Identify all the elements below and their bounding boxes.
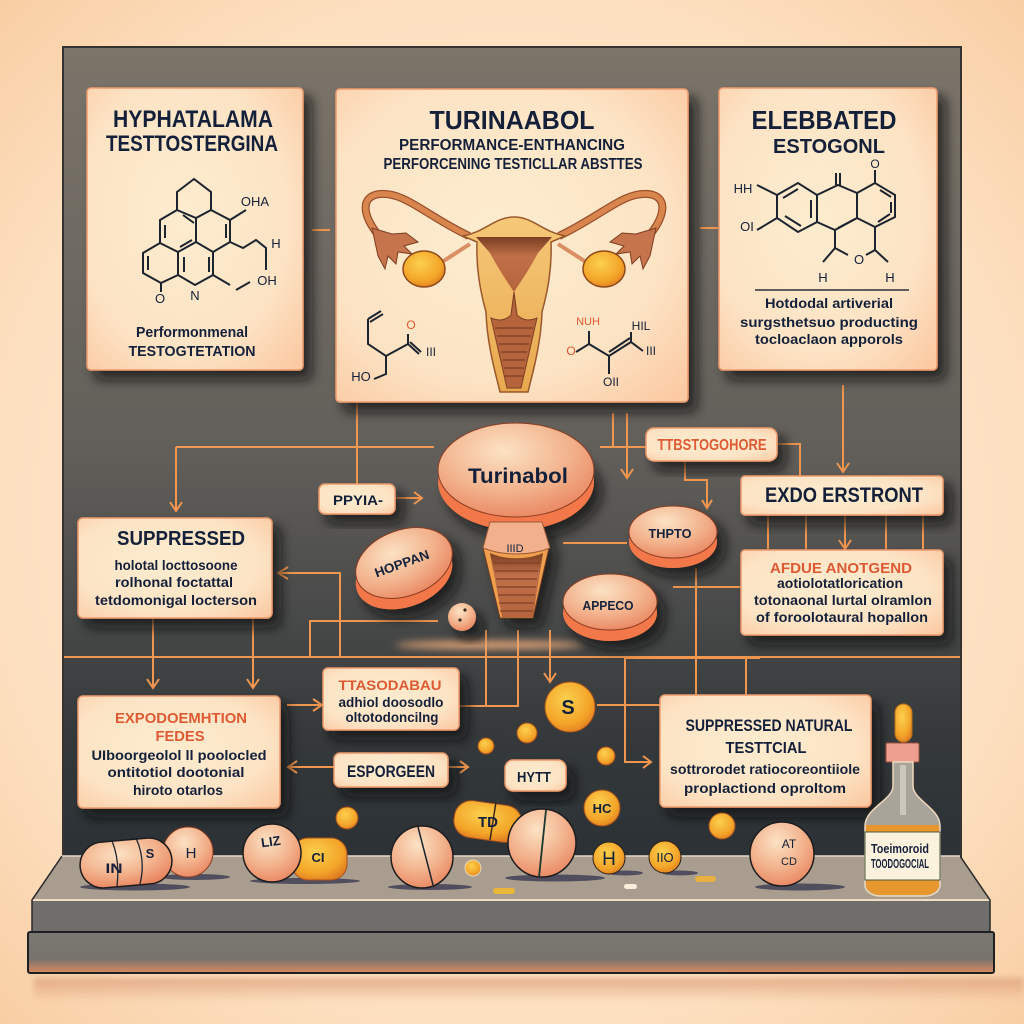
panel: turinabol anatomy: OII — [603, 375, 619, 389]
pill: turinabol with organ: Turinabol — [468, 465, 568, 488]
panel: suppressed natural testicial: SUPPRESSED NATURAL — [686, 716, 852, 735]
panel: hypothalamic testosterone: O — [155, 291, 165, 306]
panel: turinabol anatomy: NUH — [576, 316, 600, 328]
panel: hypothalamic testosterone: N — [190, 288, 200, 303]
small pill dot — [448, 603, 476, 631]
panel: turinabol anatomy — [336, 89, 688, 402]
panel: hypothalamic testosterone: TESTOGTETATION — [128, 343, 256, 360]
shelf — [28, 856, 1024, 1002]
panel: turinabol anatomy: PERFORCENING TESTICLLAR ABSTTES — [384, 156, 643, 173]
panel: suppressed natural testicial: proplactiond oproltom — [684, 780, 846, 796]
shelf pills: IN — [106, 860, 122, 876]
floating gold pills — [336, 682, 735, 839]
label: pppa — [319, 484, 395, 514]
panel: elevated estrogen: OI — [740, 219, 754, 234]
panel: elevated estrogen: ESTOGONL — [773, 136, 885, 158]
panel: turinabol anatomy: O — [566, 344, 576, 358]
glow under central organ — [395, 641, 585, 649]
organ stem — [483, 522, 549, 618]
panel: suppressed — [78, 518, 272, 618]
panel: turinabol anatomy: HO — [351, 369, 371, 384]
bottle with capsule — [865, 704, 940, 896]
label: esporgeen: ESPORGEEN — [347, 762, 435, 781]
panel: elevated estrogen: HH — [734, 181, 752, 196]
molecule diagram — [757, 170, 895, 262]
label: ttasodabau: oltotodoncilng — [346, 710, 438, 725]
gold capsule: TD — [478, 814, 498, 831]
heading: hypothalama: HYPHATALAMA — [113, 106, 273, 133]
shelf pills: H — [186, 845, 196, 862]
panel: afdue anotgend — [741, 550, 943, 635]
label: testogohore: TTBSTOGOHORE — [658, 437, 767, 454]
molecule left — [368, 311, 421, 379]
panel: turinabol anatomy: PERFORMANCE-ENTHANCING — [399, 137, 625, 154]
panel: suppressed: holotal locttosoone — [114, 557, 238, 573]
floating gold pills: S — [561, 697, 575, 719]
floating gold pills: HC — [593, 801, 612, 816]
panel: elevated estrogen: H — [885, 270, 895, 285]
pill: hoppan: HOPPAN — [372, 547, 431, 580]
shelf shadows — [80, 870, 845, 890]
heading: elebbated: ELEBBATED — [752, 105, 896, 135]
panel: exponoemtion feces: FEDES — [156, 728, 204, 745]
panel: afdue anotgend: aotiolotatlorication — [777, 575, 903, 591]
pill: hoppan — [346, 515, 462, 622]
pill: turinabol with organ: IIID — [506, 543, 524, 555]
bottle with capsule: TOODOGOCIAL — [871, 856, 929, 871]
panel: suppressed natural testicial: sottrorodet ratiocoreontiiole — [670, 761, 860, 777]
panel: afdue anotgend: of foroolotaural hopallon — [756, 609, 928, 625]
shelf pills: LIZ — [260, 833, 282, 850]
pill: thpto — [629, 506, 717, 568]
dark backboard panel — [63, 47, 961, 858]
label: esporgeen — [334, 753, 448, 787]
panel: exponoemtion feces: hiroto otarlos — [133, 782, 223, 798]
shelf pills: S — [146, 846, 155, 861]
panel: hypothalamic testosterone — [87, 88, 303, 370]
panel: turinabol anatomy: III — [426, 345, 436, 359]
panel: turinabol anatomy: HIL — [632, 319, 651, 333]
panel: suppressed natural testicial: TESTTCIAL — [726, 740, 807, 757]
panel: suppressed: tetdomonigal locterson — [95, 592, 257, 608]
label: testogohore — [646, 428, 777, 461]
molecule diagram — [143, 179, 266, 292]
panel: exponoemtion feces — [78, 696, 280, 808]
label: hytt — [505, 760, 566, 791]
label: pppa: PPYIA- — [333, 492, 383, 508]
shelf pills — [78, 809, 814, 894]
panel: hypothalamic testosterone: OHA — [241, 194, 269, 209]
panel: suppressed: SUPPRESSED — [117, 528, 245, 550]
gold capsule — [452, 798, 524, 845]
panel: elevated estrogen: tocloaclaon apporols — [755, 331, 903, 347]
heading: turinabol: TURINAABOL — [430, 105, 595, 135]
panel: turinabol anatomy: III — [646, 344, 656, 358]
panel: exponoemtion feces: ontitotiol dootonial — [108, 764, 244, 780]
caption: Performonmenal — [136, 324, 248, 341]
bottle with capsule: Toeimoroid — [871, 841, 929, 856]
molecule right — [576, 331, 643, 374]
panel: elevated estrogen: H — [818, 270, 828, 285]
panel: elevated estrogen: O — [854, 252, 864, 267]
panel: turinabol anatomy: O — [406, 318, 416, 332]
label: ttasodabau — [323, 668, 459, 730]
panel: hypothalamic testosterone: OH — [257, 273, 277, 288]
pill: thpto: THPTO — [648, 526, 692, 541]
shelf pills: CD — [781, 856, 797, 868]
label: hytt: HYTT — [517, 769, 551, 786]
panel: exponoemtion feces: EXPODOEMHTION — [115, 710, 247, 727]
panel: afdue anotgend: totonaonal lurtal olramlon — [754, 592, 932, 608]
label: exdo erstront: EXDO ERSTRONT — [765, 484, 923, 507]
pill: appeco — [563, 574, 657, 641]
shelf pills: H — [602, 849, 616, 870]
shelf pills: AT — [782, 837, 797, 851]
panel: suppressed natural testicial — [660, 695, 871, 807]
label: ttasodabau: adhiol doosodlo — [338, 695, 444, 710]
panel: exponoemtion feces: UIboorgeolol ll poolocled — [92, 747, 266, 763]
flow connector arrows — [64, 228, 960, 773]
panel: afdue anotgend: AFDUE ANOTGEND — [770, 560, 912, 577]
panel: hypothalamic testosterone: H — [271, 236, 281, 251]
shelf pills: IIO — [656, 850, 674, 865]
panel: elevated estrogen: O — [870, 157, 880, 171]
panel: suppressed: rolhonal foctattal — [115, 574, 233, 590]
icon: reproductive organ — [366, 194, 662, 392]
label: ttasodabau: TTASODABAU — [338, 677, 442, 693]
panel: elevated estrogen: surgsthetsuo producting — [740, 314, 918, 330]
panel: elevated estrogen — [719, 88, 937, 370]
shelf pills: CI — [312, 850, 324, 865]
pill: turinabol with organ — [438, 423, 594, 618]
caption: Hotdodal artiverial — [765, 295, 893, 311]
panel: hypothalamic testosterone: TESTTOSTERGINA — [106, 131, 278, 156]
pill: appeco: APPECO — [582, 598, 634, 613]
label: exdo erstront — [741, 476, 943, 515]
